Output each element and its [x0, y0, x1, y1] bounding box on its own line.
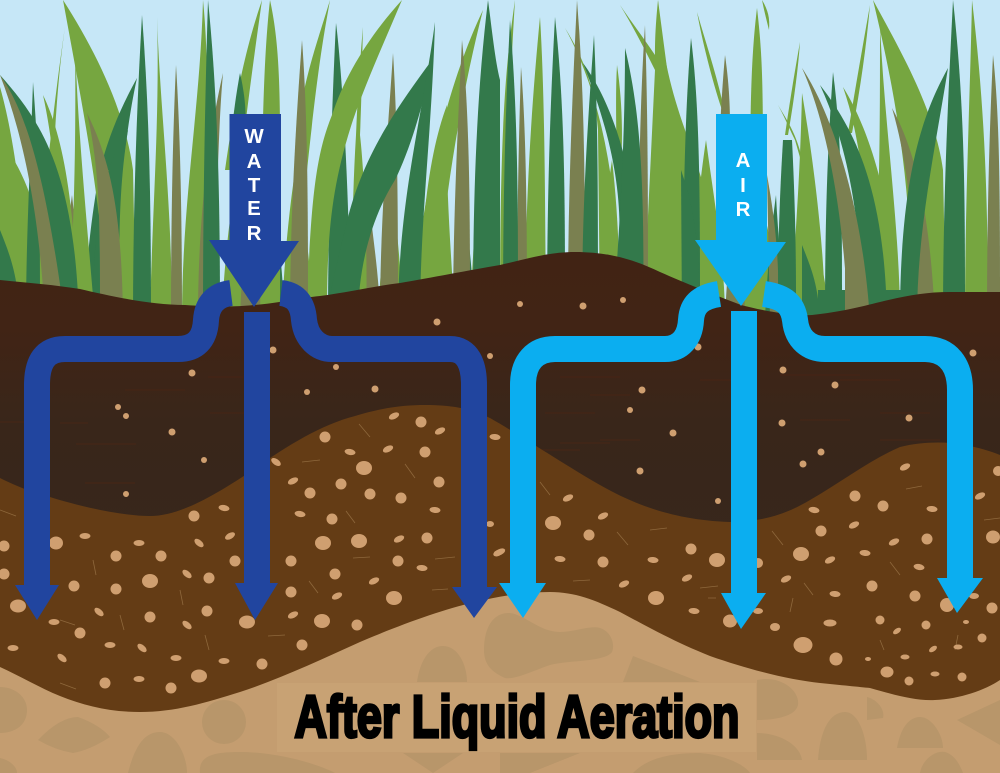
- air right branch: [764, 294, 983, 613]
- water centre branch: [235, 312, 278, 620]
- water label: W: [244, 125, 264, 148]
- air arrows: [499, 114, 983, 629]
- air label: A: [736, 149, 751, 172]
- subsoil layer: [0, 405, 1000, 773]
- air centre branch: [721, 311, 766, 629]
- bedrock sand layer: [0, 592, 1000, 773]
- air label: I: [740, 174, 746, 197]
- water label: E: [247, 197, 261, 220]
- air left branch: [499, 294, 719, 618]
- air label: R: [736, 198, 751, 221]
- title: After Liquid Aeration: [294, 684, 740, 750]
- subsoil fibres: [0, 424, 1000, 689]
- soil streaks: [0, 375, 940, 483]
- water left branch: [15, 293, 231, 620]
- water arrows: [15, 114, 497, 620]
- water label: A: [247, 150, 262, 173]
- title backing: [277, 683, 756, 752]
- water right branch: [281, 293, 497, 618]
- air main arrow: [695, 114, 786, 306]
- water label: T: [248, 174, 261, 197]
- water label: R: [247, 222, 262, 245]
- grass: [0, 0, 1000, 320]
- air label: [736, 149, 751, 221]
- water main arrow: [209, 114, 299, 307]
- pebbles: [0, 297, 1000, 694]
- topsoil layer: [0, 252, 1000, 560]
- water label: [244, 125, 264, 245]
- sand patches: [0, 613, 1000, 773]
